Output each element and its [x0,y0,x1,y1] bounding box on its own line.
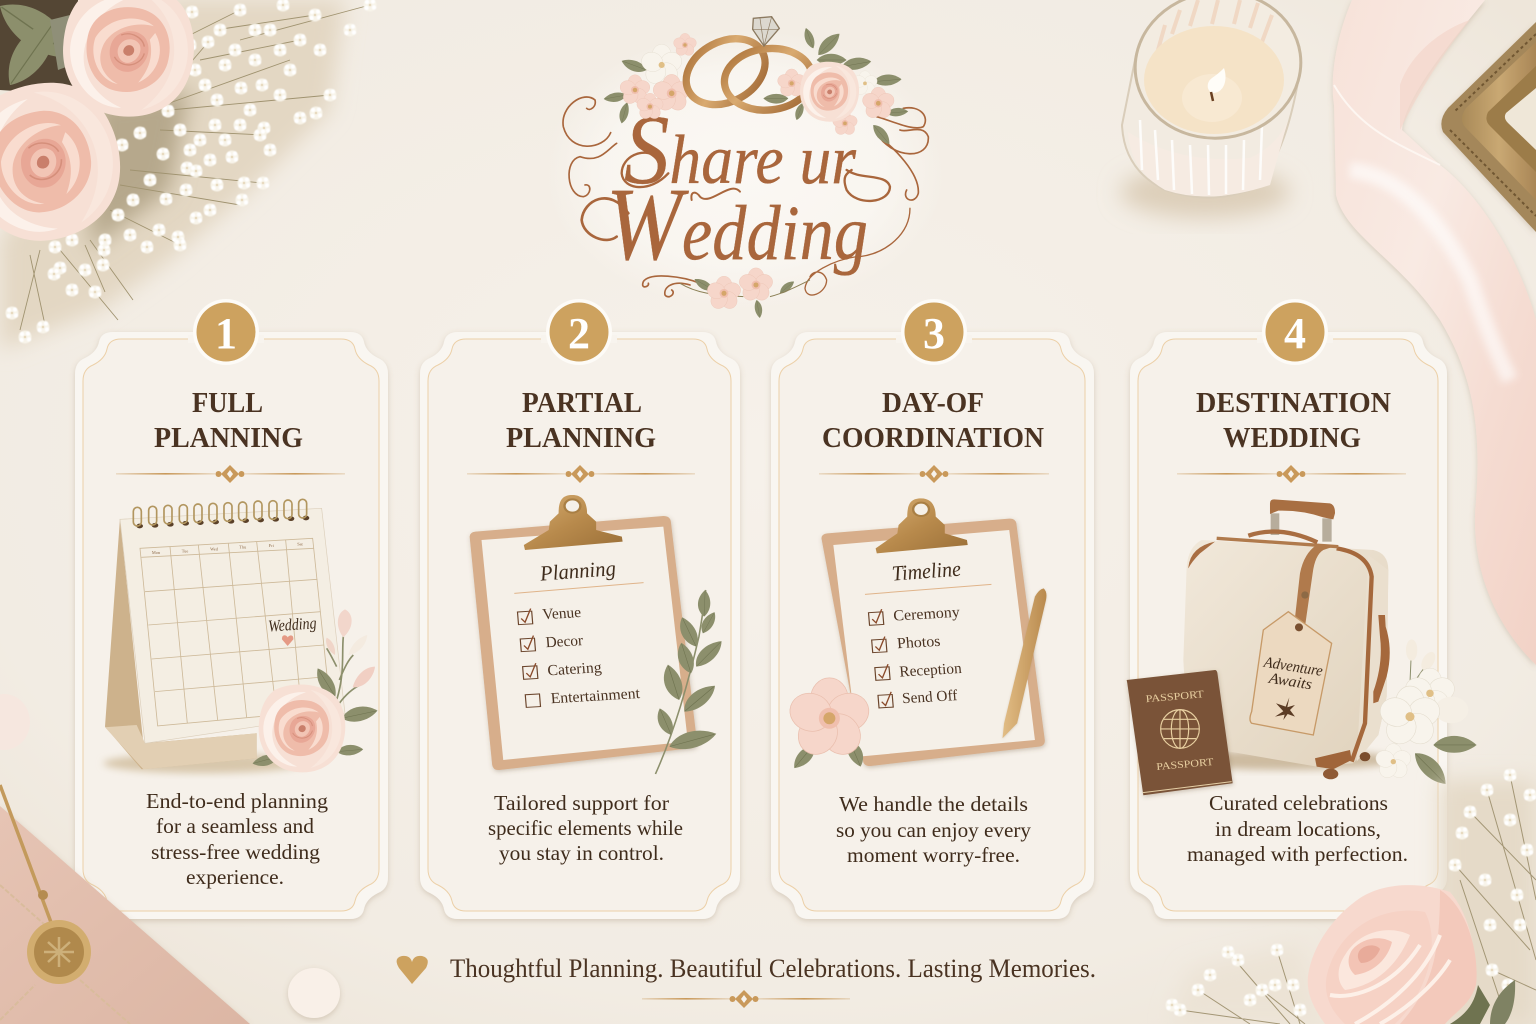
description: End-to-end planning [146,789,329,813]
wedding rings and flowers [603,17,909,319]
number badge 3: 3 [923,309,945,358]
illustration: timeline clipboard with pen and flower: Ceremony [893,603,961,624]
illustration: suitcase, luggage tag, passport and white flowers: Awaits [1267,670,1313,693]
panel: day-of coordination [771,299,1094,919]
number badge 1: 1 [215,309,237,358]
divider [467,465,695,483]
title logo: rings, florals and script wordmark: Wedding [606,167,868,282]
description: We handle the details [839,792,1028,816]
divider [1177,465,1406,483]
illustration: desk calendar with rose: Sat [297,541,304,546]
heading: FULL [192,388,263,419]
number badge 4: 4 [1284,309,1306,358]
gold picture frame corner [1441,22,1536,232]
divider [819,465,1049,483]
description: managed with perfection. [1187,842,1408,866]
heading: DESTINATION [1196,388,1391,419]
illustration: planning clipboard with leaf sprig: Entertainment [550,684,641,707]
heading [822,388,1044,454]
description: so you can enjoy every [836,818,1031,842]
divider [116,465,345,483]
description: Tailored support for [494,791,669,815]
illustration: desk calendar with rose: Tue [182,548,188,553]
number badge 2: 2 [568,309,590,358]
illustration: suitcase, luggage tag, passport and white flowers: PASSPORT [1145,689,1205,705]
footer tagline [397,954,1096,1008]
wordmark: Share ur [624,94,857,205]
heading: PARTIAL [522,388,642,419]
illustration: suitcase, luggage tag, passport and white flowers: PASSPORT [1156,757,1215,773]
description [146,789,329,889]
footer tagline: Thoughtful Planning. Beautiful Celebrations. Lasting Memories. [450,954,1096,983]
rose petals [0,694,340,1018]
heading: PLANNING [506,423,656,454]
gypsophila florets [6,0,376,344]
description: specific elements while [488,816,683,840]
panel: destination wedding [1127,299,1477,919]
illustration: timeline clipboard with pen and flower: Reception [899,659,963,680]
description: experience. [186,865,284,889]
heading: DAY-OF [882,388,984,419]
description: moment worry-free. [847,843,1020,867]
flourishes [563,97,928,297]
number badge 3 [901,299,967,365]
illustration: desk calendar with rose: Wedding [268,613,317,636]
description [836,792,1031,867]
title logo: rings, florals and script wordmark [545,17,945,319]
top-left floral cluster: roses and baby's breath [0,0,377,350]
icon: heart [397,956,428,984]
illustration: desk calendar with rose: Wed [210,547,219,552]
description: you stay in control. [499,841,664,865]
bottom spray [692,276,715,294]
number badge 4 [1262,299,1328,365]
illustration: timeline clipboard with pen and flower: Send Off [901,686,958,707]
illustration: suitcase, luggage tag, passport and white flowers: Adventure [1262,654,1324,680]
description [488,791,683,865]
stems [20,5,370,330]
illustration: planning clipboard with leaf sprig: Venue [542,603,582,623]
illustration: desk calendar with rose: Mon [152,550,161,555]
description [1187,791,1408,866]
panel: partial planning [420,299,740,919]
description: in dream locations, [1215,817,1381,841]
illustration: timeline clipboard with pen and flower: Photos [896,632,941,652]
footer divider [642,990,850,1008]
illustration: desk calendar with rose [103,499,379,773]
illustration: desk calendar with rose: Fri [269,543,275,548]
light halo behind title [545,30,945,310]
illustration: timeline clipboard with pen and flower: Timeline [891,557,962,586]
illustration: desk calendar with rose: Thu [239,545,247,550]
illustration: planning clipboard with leaf sprig: Planning [538,557,617,586]
number badge 2 [546,299,612,365]
heading [154,388,303,454]
illustration: planning clipboard with leaf sprig: Catering [547,658,603,679]
description: Curated celebrations [1209,791,1388,815]
heading [1196,388,1391,454]
panel: full planning [75,299,388,919]
heading: COORDINATION [822,423,1044,454]
bottom-right floral cluster: rose and baby's breath [1166,768,1536,1024]
illustration: suitcase, luggage tag, passport and white flowers [1127,499,1477,795]
large rose [1308,885,1477,1024]
description: for a seamless and [156,814,315,838]
heading: WEDDING [1223,423,1361,454]
ribbon: blush satin [1333,0,1536,665]
number badge 1 [193,299,259,365]
illustration: planning clipboard with leaf sprig: Decor [545,631,584,651]
envelope with wax seal [0,785,250,1024]
heading: PLANNING [154,423,303,454]
description: stress-free wedding [151,840,321,864]
candle in glass holder [1120,0,1310,218]
illustration: timeline clipboard with pen and flower [785,498,1046,772]
heading [506,388,656,454]
illustration: planning clipboard with leaf sprig [470,495,727,774]
